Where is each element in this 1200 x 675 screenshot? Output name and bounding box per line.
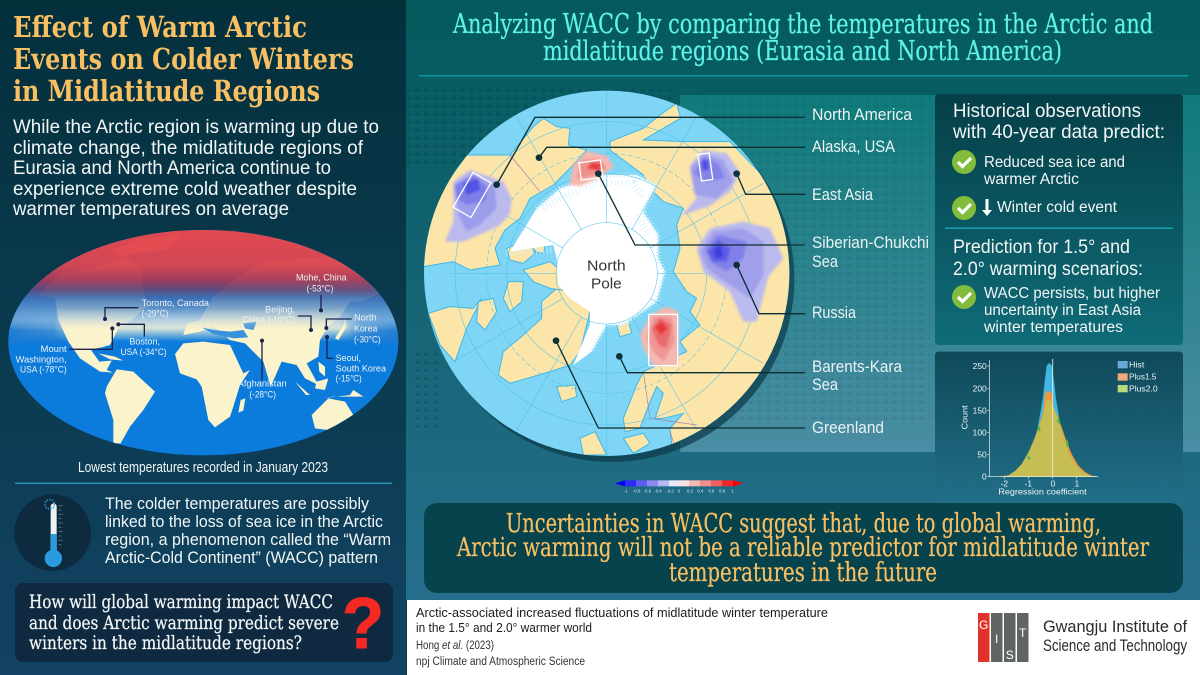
panel: observations and predictions: Historical observations — [953, 100, 1141, 122]
panel: observations and predictions: uncertainty in East Asia — [984, 302, 1141, 319]
intro text block: climate change, the midlatitude regions of — [13, 138, 364, 159]
region labels: Russia — [812, 304, 857, 322]
label: Afghanistan: Afghanistan — [238, 379, 287, 389]
color scale legend: 0 — [678, 489, 681, 494]
panel: question: winters in the midlatitude regions? — [29, 632, 302, 654]
label: Beijing — [243, 304, 313, 332]
panel: observations and predictions: WACC persists, but higher — [984, 285, 1160, 302]
panel: left background — [0, 0, 406, 675]
region labels: Siberian-Chukchi — [812, 234, 929, 252]
panel: histogram chart — [935, 352, 1183, 502]
North Pole label — [587, 258, 626, 293]
intro text block: experience extreme cold weather despite — [13, 179, 357, 200]
region labels: North America — [812, 106, 913, 124]
label: Seoul: South Korea — [336, 363, 387, 373]
label: Toronto: Toronto, Canada — [142, 298, 210, 308]
label: Seoul: Seoul, — [336, 353, 361, 363]
panel: citation footer: npj Climate and Atmospheric Science — [416, 656, 585, 668]
color scale legend: 0.2 — [687, 489, 694, 494]
institution name — [1043, 617, 1187, 655]
panel: observations and predictions: Reduced sea ice and — [984, 154, 1125, 171]
WACC text block — [105, 495, 391, 567]
label: Mount Washington: Washington, — [16, 355, 67, 365]
WACC text block: Arctic-Cold Continent” (WACC) pattern — [105, 549, 378, 567]
axes: 0 — [982, 472, 987, 482]
color scale legend: 1 — [731, 489, 734, 494]
North Pole label: North — [587, 258, 626, 274]
label: Boston: USA (-34°C) — [121, 347, 167, 357]
color scale legend: 0.8 — [719, 489, 726, 494]
label: Mount Washington: USA (-78°C) — [20, 365, 67, 375]
icon: check 2 — [952, 196, 976, 220]
label: Afghanistan: (-28°C) — [249, 390, 276, 400]
logo: GIST: I — [995, 632, 998, 646]
label: Boston: Boston, — [129, 336, 160, 346]
logo: GIST — [978, 613, 1028, 662]
map caption: Lowest temperatures recorded in January 2023 — [78, 459, 328, 476]
color scale legend: -0.6 — [644, 489, 652, 494]
pointer: North America — [493, 117, 805, 188]
axes: 1 — [1075, 478, 1080, 488]
callout: conclusion: temperatures in the future — [669, 558, 937, 588]
panel: question: How will global warming impact WACC — [29, 591, 333, 613]
panel: observations and predictions: winter temperatures — [983, 319, 1123, 336]
polar map — [410, 85, 810, 494]
pointer: Russia — [733, 262, 805, 314]
panel: citation footer: in the 1.5° and 2.0° warmer world — [416, 620, 592, 635]
icon: check 1 — [952, 150, 976, 174]
chart legend: Plus1.5 — [1129, 371, 1157, 381]
label: Beijing: Beijing, — [265, 304, 295, 314]
region labels — [812, 106, 929, 437]
color scale legend: -1 — [624, 489, 629, 494]
axes: 250 — [973, 361, 987, 371]
region labels: Sea — [812, 253, 839, 271]
label: Boston — [116, 322, 167, 357]
heading: right panel — [452, 9, 1153, 67]
panel: right background — [290, 0, 1200, 600]
callout: conclusion — [424, 503, 1183, 593]
label: Toronto: (-29°C) — [142, 309, 168, 319]
color scale legend: -0.8 — [633, 489, 641, 494]
label: Mount Washington — [16, 326, 114, 375]
WACC text block: region, a phenomenon called the “Warm — [105, 531, 391, 549]
intro text block — [12, 117, 379, 220]
histogram distributions — [998, 363, 1098, 477]
anomaly: Russia cold — [697, 222, 783, 322]
label: Beijing: China (-10°C) — [243, 315, 295, 325]
title: Events on Colder Winters — [13, 42, 354, 76]
icon: question mark: ? — [342, 584, 384, 664]
icon: thermometer — [14, 494, 91, 571]
chart legend: Plus2.0 — [1129, 383, 1158, 393]
anomaly: Siberian-Chukchi warm — [569, 151, 614, 186]
label: North Korea — [324, 313, 381, 344]
axes — [959, 360, 1098, 496]
label: Mohe: Mohe, China — [296, 273, 347, 283]
title: Effect of Warm Arctic — [13, 10, 307, 44]
logo: GIST: S — [1006, 648, 1014, 662]
pointer: Alaska — [536, 147, 805, 161]
axes: 50 — [977, 449, 987, 459]
label: Toronto — [103, 298, 210, 321]
region labels: Barents-Kara — [812, 358, 903, 376]
panel: observations and predictions: with 40-year data predict: — [952, 121, 1165, 143]
anomaly: North America cold — [445, 170, 512, 242]
heading: right panel: midlatitude regions (Eurasia and North America) — [543, 36, 1062, 67]
axes: -2 — [1001, 478, 1008, 488]
title: in Midlatitude Regions — [13, 74, 320, 108]
region labels: Greenland — [812, 419, 884, 437]
pointer: East Asia — [733, 170, 805, 194]
logo: GIST: G — [979, 618, 988, 632]
axes: 150 — [973, 405, 987, 415]
intro text block: warmer temperatures on average — [12, 199, 289, 220]
panel: observations and predictions: warmer Arctic — [983, 171, 1079, 188]
panel: observations and predictions — [935, 94, 1183, 345]
institution name: Gwangju Institute of — [1043, 617, 1187, 636]
world temperature map — [0, 230, 406, 457]
panel: question — [15, 583, 393, 664]
panel: citation footer — [407, 600, 1200, 675]
chart legend: Hist — [1129, 360, 1145, 370]
pointer: Siberian-Chukchi Sea — [595, 170, 805, 245]
color scale legend: -0.4 — [654, 489, 662, 494]
panel: observations and predictions: Prediction for 1.5° and — [953, 236, 1130, 258]
WACC text block: The colder temperatures are possibly — [105, 495, 370, 513]
label: North Korea: Korea — [354, 323, 378, 333]
label: Afghanistan — [238, 339, 287, 400]
intro text block: Eurasia and North America continue to — [13, 158, 331, 179]
label: Mohe — [296, 273, 347, 312]
axes: 100 — [973, 427, 987, 437]
label: North Korea: North — [354, 313, 377, 323]
pointer: Greenland — [553, 337, 805, 428]
color scale legend: 0.4 — [697, 489, 704, 494]
panel: citation footer: Arctic-associated increased fluctuations of midlatitude winter temperature — [416, 605, 828, 620]
anomaly: East Asia cold — [682, 150, 740, 216]
panel: question: and does Arctic warming predict severe — [29, 612, 339, 634]
region labels: Sea — [812, 376, 839, 394]
chart legend — [1118, 360, 1158, 393]
panel: observations and predictions: 2.0° warming scenarios: — [953, 258, 1143, 280]
axes: 200 — [973, 383, 987, 393]
anomaly: Barents-Kara warm — [640, 307, 678, 366]
North Pole label: Pole — [591, 277, 622, 293]
color scale legend: -0.2 — [666, 489, 674, 494]
panel: citation footer: Hong et al. (2023) — [416, 640, 494, 652]
intro text block: While the Arctic region is warming up due to — [13, 117, 379, 138]
region labels: Alaska, USA — [812, 138, 895, 156]
label: Seoul — [325, 335, 387, 384]
color scale legend — [615, 480, 743, 494]
axes: 0 — [1051, 478, 1056, 488]
logo: GIST: T — [1019, 626, 1027, 640]
icon: check 3 — [952, 285, 976, 309]
WACC text block: linked to the loss of sea ice in the Arctic — [105, 513, 383, 531]
color scale legend: 0.6 — [708, 489, 715, 494]
icon: down arrow — [982, 199, 992, 216]
axes: Regression coefficient — [998, 486, 1087, 496]
axes: Count — [959, 405, 969, 429]
region labels: East Asia — [812, 186, 874, 204]
label: Seoul: (-15°C) — [336, 374, 362, 384]
label: North Korea: (-30°C) — [354, 334, 381, 344]
label: Mount Washington: Mount — [41, 344, 67, 354]
panel: observations and predictions: Winter cold event — [997, 199, 1118, 216]
title — [13, 10, 354, 108]
label: Mohe: (-53°C) — [307, 284, 333, 294]
pointer: Barents-Kara Sea — [616, 353, 805, 373]
axes: -1 — [1025, 478, 1032, 488]
